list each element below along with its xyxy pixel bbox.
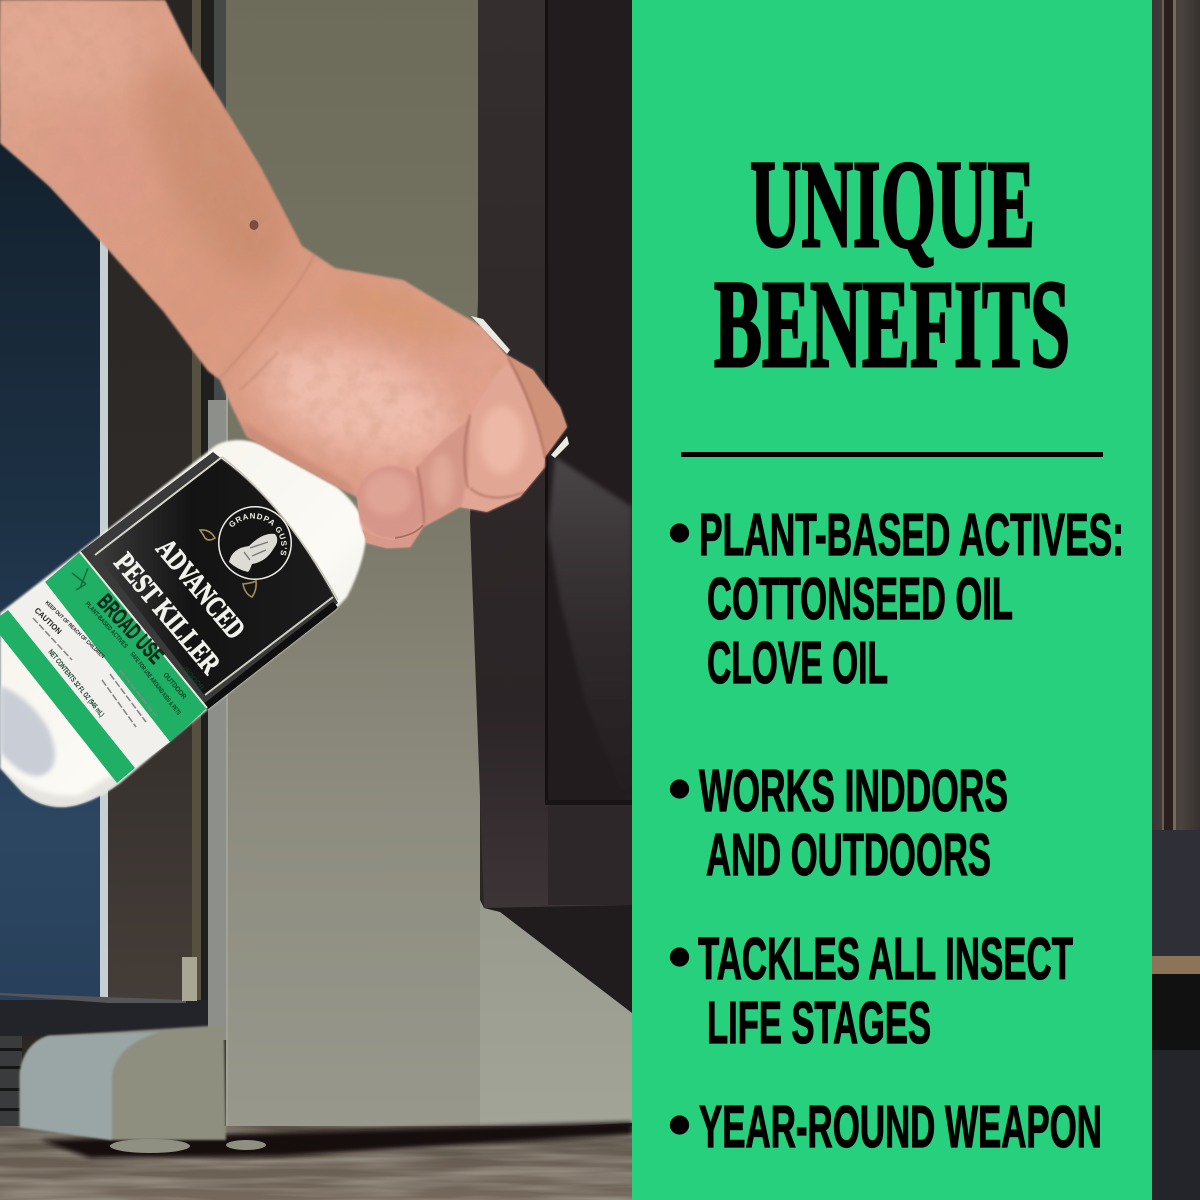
spray bottle: NET CONTENTS 32 FL OZ (946 mL) [46,648,107,719]
spray bottle: SAFE FOR USE AROUND KIDS & PETS [128,651,182,717]
thumb pad [356,466,428,538]
product name: ADVANCED [150,533,251,645]
benefit 2: indoors and outdoors [670,758,1008,888]
divider [681,452,1103,457]
lower right wall [480,900,632,1131]
arm and hand [0,0,600,560]
green net contents stripe [0,610,135,783]
spray bottle: INDOOR [181,666,205,692]
trigger top sliver [471,316,510,354]
ring finger [417,420,470,525]
benefit 1: plant-based actives: CLOVE OIL [707,630,888,696]
index finger [507,355,567,457]
lower fridge gap and foot [0,1000,208,1036]
wall panel [226,0,480,1140]
spray mist [548,457,632,820]
right cabinet strip [1152,0,1200,1200]
benefit 3: insect life stages: LIFE STAGES [707,990,931,1056]
finger creases [417,358,545,524]
heading [714,136,1070,394]
spray bottle: CAUTION [33,606,63,636]
floor [0,1126,632,1200]
white caution label [8,582,170,768]
panel: benefits [632,0,1152,1200]
benefit 1: plant-based actives [670,502,1124,696]
nozzle tip [551,436,569,458]
spray bottle: BROAD USE [92,589,169,669]
fridge blue steel panel [0,120,100,1002]
gold ornaments [200,530,256,597]
bottle base recess [0,686,55,776]
green broad use band [45,552,207,742]
skin shading [142,62,284,274]
benefit 2: indoors and outdoors: WORKS INDDORS [699,758,1008,824]
benefit 3: insect life stages [670,926,1073,1056]
middle finger [460,362,545,512]
black front label [80,452,338,710]
spray bottle: OUTDOOR [161,672,187,701]
spray bottle [0,438,367,809]
benefit 2: indoors and outdoors: AND OUTDOORS [706,822,991,888]
photo background: kitchen appliance and cabinet [0,0,632,1200]
product name: PEST KILLER [108,547,227,681]
brand seal [218,506,292,580]
freckle texture [0,0,500,523]
dark cabinet [470,0,632,1013]
brand seal: GRANDPA GUS'S [229,513,287,556]
spray bottle: KEEP OUT OF REACH OF CHILDREN [44,600,105,660]
bottle body [0,440,367,807]
spray bottle: PLANT-BASED ACTIVES [84,601,129,650]
